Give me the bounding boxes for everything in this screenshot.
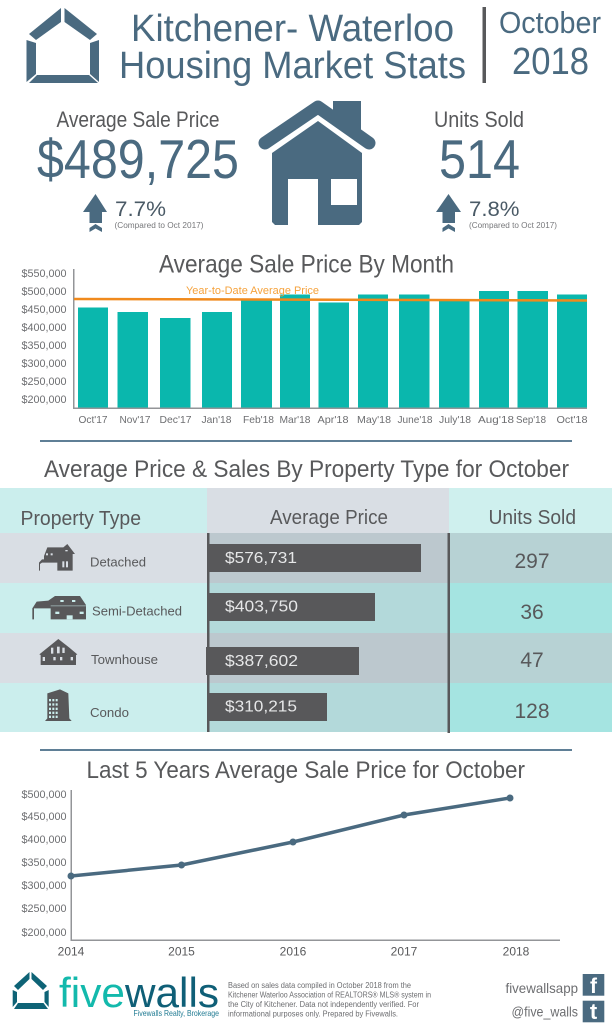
disclaimer: informational purposes only. Prepared by Fivewalls. [228,1010,398,1018]
table header [0,488,612,533]
x axis labels: Jan'18 [202,414,232,426]
y axis labels: $200,000 [22,394,66,406]
table header: Units Sold [488,507,576,529]
x axis labels: 2014 [58,944,85,958]
title [119,8,466,87]
x axis labels: May'18 [357,414,391,426]
x axis labels: Dec'17 [160,414,192,426]
row: semi-detached: $403,750 [225,598,298,616]
stat: average sale price: (Compared to Oct 2017) [114,221,204,230]
icon: house [265,101,369,226]
x axis labels: Nov'17 [120,414,151,426]
icon: up arrow [436,194,461,232]
icon: facebook: f [590,975,598,998]
stat: units sold: (Compared to Oct 2017) [469,221,557,230]
row: condo [45,689,550,723]
y axis labels: $450,000 [22,811,66,823]
y axis labels: $200,000 [22,927,66,939]
x axis labels: Oct'17 [78,414,108,426]
date divider [482,7,486,83]
y axis labels: $300,000 [22,358,66,370]
date [499,5,601,83]
icon: twitter [583,999,604,1024]
row: detached: 297 [514,550,550,573]
row: semi-detached: 36 [520,601,544,624]
stat: average sale price: 7.7% [115,198,166,221]
row: semi-detached [32,593,544,624]
y axis labels: $350,000 [22,857,66,869]
x axis labels: Mar'18 [280,414,311,426]
row: townhouse: Townhouse [91,652,158,667]
y axis labels: $550,000 [22,268,66,280]
stat: units sold: 7.8% [469,198,520,221]
stat: average sale price: $489,725 [37,128,239,190]
row: condo: 128 [514,700,550,723]
logo wordmark: walls [124,969,219,1016]
y axis labels [22,268,66,406]
trend line [68,794,514,880]
title: Kitchener- Waterloo [131,8,454,50]
table header: Average Price [270,507,388,529]
y axis labels: $500,000 [22,286,66,298]
logo wordmark: five [59,969,125,1016]
chart title: Last 5 Years Average Sale Price for October [86,757,525,784]
y axis labels: $450,000 [22,304,66,316]
row: detached: Detached [90,554,146,570]
twitter handle: @five_walls [512,1004,578,1020]
icon: fivewalls logo mark [26,8,99,83]
x axis labels: Feb'18 [243,414,274,426]
year-to-date label: Year-to-Date Average Price [186,285,319,297]
y axis labels: $250,000 [22,903,66,915]
column dividers [207,533,450,733]
y axis labels: $350,000 [22,340,66,352]
x axis labels: July'18 [439,414,471,426]
row: townhouse [39,639,544,675]
stat: units sold: 514 [439,128,520,190]
icon: up arrow [83,194,107,232]
icon: twitter: t [590,999,598,1024]
bars [78,291,587,408]
date: 2018 [512,41,589,83]
y axis labels: $500,000 [22,789,66,801]
icon: facebook [583,974,604,998]
icon: townhouse [39,639,77,665]
axes [70,790,560,941]
table header: Property Type [20,508,141,530]
x axis labels: Sep'18 [516,414,546,426]
y axis labels: $400,000 [22,322,66,334]
y axis labels [22,789,66,939]
x axis labels: 2015 [168,944,195,958]
table: price and sales by property type [0,488,612,733]
x axis labels: 2017 [391,944,418,958]
section heading: property type: Average Price & Sales By Property Type for October [44,456,569,483]
facebook handle: fivewallsapp [506,980,578,996]
stat: average sale price: Average Sale Price [56,107,220,132]
line chart: last 5 years [22,757,560,958]
disclaimer [228,981,431,1018]
brokerage line: Fivewalls Realty, Brokerage [134,1008,219,1018]
disclaimer: Based on sales data compiled in October 2018 from the [228,981,412,990]
chart title: Average Sale Price By Month [159,250,454,278]
axes [73,269,587,409]
x axis labels: June'18 [398,414,433,426]
row: condo: Condo [90,705,129,720]
x axis labels [78,414,588,426]
icon: semi-detached house [32,596,86,619]
x axis labels: 2016 [280,944,307,958]
x axis labels [58,944,530,958]
title: Housing Market Stats [119,45,466,87]
footer [13,969,604,1024]
y axis labels: $400,000 [22,834,66,846]
y axis labels: $250,000 [22,376,66,388]
bar chart: average sale price by month [22,250,588,426]
y axis labels: $300,000 [22,880,66,892]
icon: condo tower [45,689,72,721]
disclaimer: Kitchener Waterloo Association of REALTORS® MLS® system in [228,990,431,1000]
x axis labels: Apr'18 [318,414,349,426]
logo wordmark [59,969,219,1016]
disclaimer: the City of Kitchener. Data not independently verified. For [228,1000,419,1009]
row: semi-detached: Semi-Detached [92,604,182,618]
table row backgrounds [0,533,612,732]
stat: units sold: Units Sold [434,107,524,132]
icon: detached house [39,544,75,571]
row: detached: $576,731 [225,550,297,567]
row: condo: $310,215 [225,698,297,716]
stat: average sale price [37,107,239,232]
date: October [499,5,601,40]
row: townhouse: 47 [520,649,544,672]
header [26,5,601,87]
x axis labels: Oct'18 [556,414,588,426]
row: detached [39,544,550,573]
year-to-date average line [74,299,587,300]
x axis labels: 2018 [503,944,530,958]
x axis labels: Aug'18 [478,414,514,426]
stat: units sold [434,107,557,232]
icon: footer logo mark [13,972,49,1009]
row: townhouse: $387,602 [225,653,298,670]
